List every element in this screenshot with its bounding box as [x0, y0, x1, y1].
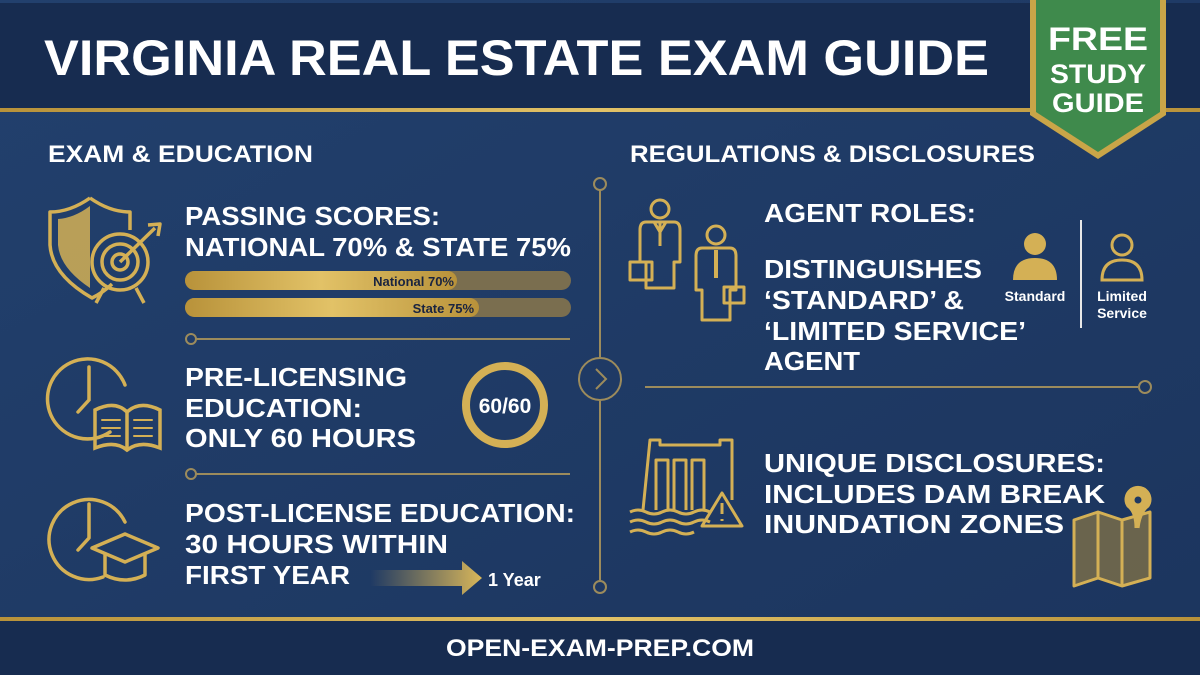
header band [0, 3, 1200, 112]
text block: unique disclosures: INUNDATION ZONES [764, 509, 1064, 539]
footer band [0, 617, 1200, 675]
icon: two agents [630, 200, 744, 320]
text block: passing scores [185, 201, 571, 262]
text block: agent roles: ‘STANDARD’ & [764, 285, 964, 315]
text block: pre-licensing education: ONLY 60 HOURS [185, 423, 416, 453]
central divider with arrow [579, 178, 621, 593]
text block: post-license education [185, 498, 575, 590]
icon: shield and target [50, 198, 160, 303]
text block: passing scores: NATIONAL 70% & STATE 75% [185, 232, 571, 262]
text block: passing scores: PASSING SCORES: [185, 201, 440, 231]
text block: agent roles: ‘LIMITED SERVICE’ [764, 316, 1026, 346]
text block: unique disclosures: UNIQUE DISCLOSURES: [764, 448, 1105, 478]
arrow: 1 year: 1 Year [488, 570, 541, 590]
text block: pre-licensing education: EDUCATION: [185, 393, 362, 423]
text block: post-license education: POST-LICENSE EDUCATION: [185, 498, 575, 528]
title: VIRGINIA REAL ESTATE EXAM GUIDE [44, 30, 989, 86]
icon: clock and graduation cap [49, 500, 158, 580]
footer text: OPEN-EXAM-PREP.COM [446, 635, 754, 662]
text block: unique disclosures [764, 448, 1105, 539]
text block: post-license education: FIRST YEAR [185, 560, 350, 590]
icon: standard vs limited service agents [1005, 220, 1147, 328]
text block: unique disclosures: INCLUDES DAM BREAK [764, 479, 1105, 509]
badge: free study guide: STUDY [1050, 59, 1146, 89]
ring chart: 60/60 [466, 366, 544, 444]
text block: agent roles: DISTINGUISHES [764, 254, 982, 284]
ring chart: 60/60: 60/60 [479, 395, 531, 418]
text block: pre-licensing education: PRE-LICENSING [185, 362, 407, 392]
badge: free study guide: GUIDE [1052, 88, 1144, 118]
icon: map with pin [1074, 487, 1150, 586]
text block: agent roles: AGENT ROLES: [764, 198, 976, 228]
section heading: exam & education: EXAM & EDUCATION [48, 141, 313, 168]
text block: post-license education: 30 HOURS WITHIN [185, 529, 448, 559]
text block: pre-licensing education [185, 362, 416, 453]
text block: agent roles [764, 198, 1026, 376]
arrow: 1 year [370, 561, 541, 595]
badge: free study guide: FREE [1048, 21, 1148, 57]
section heading: regulations & disclosures: REGULATIONS & DISCLOSURES [630, 141, 1035, 168]
bar chart: passing scores: State 75% [413, 301, 474, 316]
text block: agent roles: AGENT [764, 346, 860, 376]
icon: dam with warning [630, 440, 742, 534]
bar chart: passing scores: National 70% [373, 274, 454, 289]
icon: standard vs limited service agents: Standard [1005, 288, 1065, 304]
icon: standard vs limited service agents: Limited [1097, 288, 1147, 304]
badge: free study guide [1030, 0, 1166, 159]
icon: standard vs limited service agents: Service [1097, 305, 1147, 321]
icon: clock and book [48, 359, 160, 450]
bar chart: passing scores [185, 271, 571, 317]
